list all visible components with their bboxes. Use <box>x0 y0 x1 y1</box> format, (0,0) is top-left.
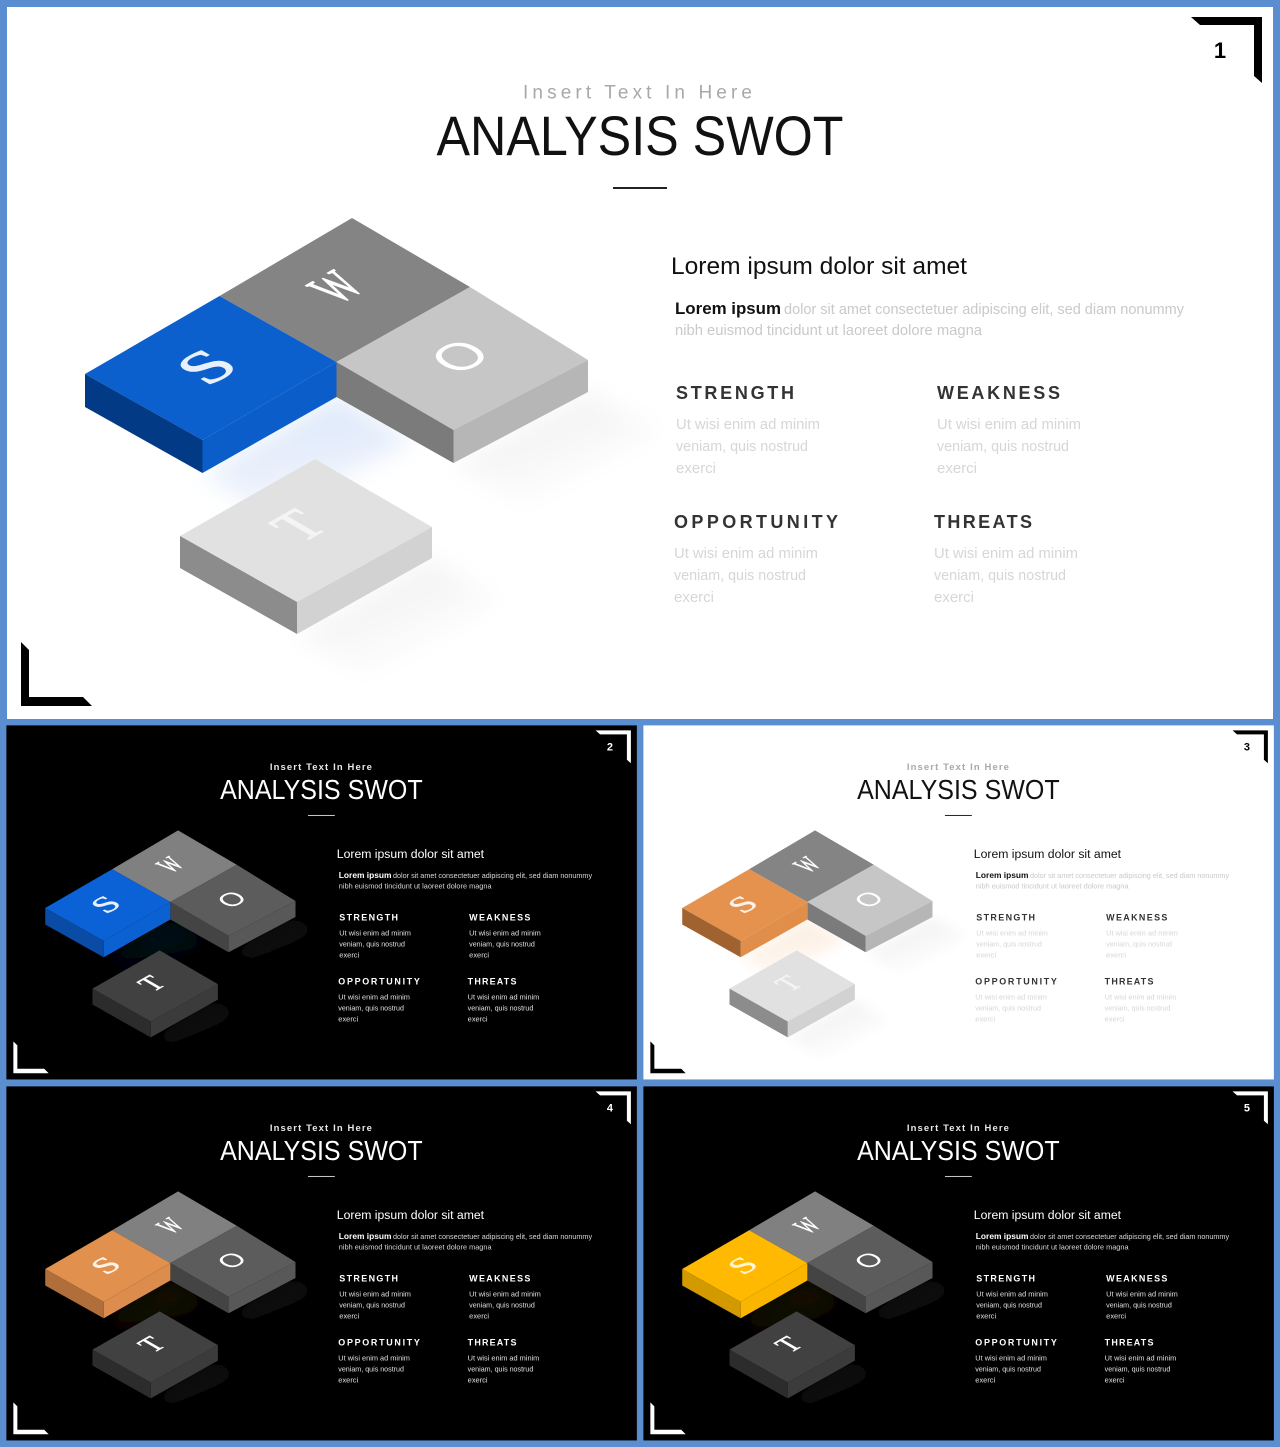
slide 5 weakness: veniam, quis nostrud <box>1106 1300 1172 1309</box>
slide 5 weakness: exerci <box>1106 1311 1126 1320</box>
slide 1 isometric SWOT blocks: O <box>416 331 505 382</box>
slide 5 threats: veniam, quis nostrud <box>1105 1365 1170 1374</box>
slide 5 strength: exerci <box>976 1311 997 1320</box>
slide 2 corner mark bottom left <box>13 1041 49 1073</box>
slide 4 opportunity: veniam, quis nostrud <box>338 1365 404 1374</box>
slide 5 title: ANALYSIS SWOT <box>857 1135 1060 1166</box>
slide 3 weakness: veniam, quis nostrud <box>1106 939 1172 948</box>
slide 3 opportunity <box>975 977 1057 1023</box>
slide 4 isometric SWOT blocks: S <box>83 1252 130 1279</box>
slide 4 text heading: Lorem ipsum dolor sit amet <box>337 1208 485 1222</box>
slide 2 isometric SWOT blocks: W <box>150 853 192 877</box>
slide 1 paragraph: nibh euismod tincidunt ut laoreet dolore magna <box>675 322 983 339</box>
slide 5 opportunity <box>975 1338 1057 1384</box>
slide 1 paragraph: Lorem ipsum <box>675 299 781 318</box>
slide 2 weakness: exerci <box>469 950 489 959</box>
slide 4 opportunity: exerci <box>338 1375 359 1384</box>
slide 4 opportunity <box>338 1338 420 1384</box>
slide 5 isometric SWOT blocks: O <box>847 1248 891 1273</box>
slide 4 strength: Ut wisi enim ad minim <box>339 1289 411 1298</box>
slide 1 weakness: WEAKNESS <box>937 383 1060 403</box>
slide 3 strength: exerci <box>976 950 997 959</box>
slide 2 isometric SWOT blocks: S <box>83 891 130 918</box>
slide 3 weakness: Ut wisi enim ad minim <box>1106 928 1178 937</box>
slide 3 subtitle: Insert Text In Here <box>907 762 1009 773</box>
slide 4 weakness: WEAKNESS <box>469 1273 530 1283</box>
slide 2 threats: THREATS <box>468 977 516 987</box>
slide 4 paragraph <box>339 1231 592 1252</box>
slide 5 opportunity: veniam, quis nostrud <box>975 1365 1041 1374</box>
slide 5 opportunity: exerci <box>975 1375 996 1384</box>
slide 3 isometric SWOT blocks: O <box>847 887 891 912</box>
slide 2 text heading: Lorem ipsum dolor sit amet <box>337 847 485 861</box>
slide 2 opportunity: veniam, quis nostrud <box>338 1004 404 1013</box>
slide 3 paragraph: Lorem ipsum <box>976 870 1029 880</box>
slide 4 paragraph: Lorem ipsum <box>339 1231 392 1241</box>
slide 3 strength <box>976 912 1048 959</box>
slide 2 strength: Ut wisi enim ad minim <box>339 928 411 937</box>
slide 1 opportunity: exerci <box>674 589 714 606</box>
slide 2 threats: Ut wisi enim ad minim <box>468 993 539 1002</box>
slide 1 opportunity: Ut wisi enim ad minim <box>674 545 818 562</box>
slide 5 corner mark bottom left <box>650 1402 686 1434</box>
slide 5 paragraph: Lorem ipsum <box>976 1231 1029 1241</box>
slide 1 weakness <box>937 383 1081 477</box>
slide 4 threats: veniam, quis nostrud <box>468 1365 533 1374</box>
slide 1 strength: veniam, quis nostrud <box>676 438 808 455</box>
slide 5 threats: exerci <box>1105 1375 1125 1384</box>
slide 3 paragraph <box>976 870 1229 891</box>
slide 5 paragraph <box>976 1231 1229 1252</box>
slide 2 isometric SWOT blocks: T <box>131 972 173 996</box>
slide 5 isometric SWOT blocks: T <box>768 1333 810 1357</box>
slide 4 opportunity: Ut wisi enim ad minim <box>338 1354 410 1363</box>
slide 3 isometric SWOT blocks: T <box>768 972 810 996</box>
slide 3 weakness: WEAKNESS <box>1106 912 1167 922</box>
slide 3 threats: exerci <box>1105 1014 1125 1023</box>
slide 1 subtitle: Insert Text In Here <box>523 82 752 104</box>
slide 5 weakness <box>1106 1273 1178 1320</box>
slide 5 weakness: WEAKNESS <box>1106 1273 1167 1283</box>
slide 1 threats: exerci <box>934 589 974 606</box>
slide 3 number: 3 <box>1244 741 1250 753</box>
slide 3 strength: veniam, quis nostrud <box>976 939 1042 948</box>
slide 2 strength: exerci <box>339 950 360 959</box>
slide 4 threats: THREATS <box>468 1338 516 1348</box>
slide 2 threats: exerci <box>468 1014 488 1023</box>
slide 3 opportunity: Ut wisi enim ad minim <box>975 993 1047 1002</box>
slide 2 opportunity: Ut wisi enim ad minim <box>338 993 410 1002</box>
slide 2 weakness: veniam, quis nostrud <box>469 939 535 948</box>
slide 5 number: 5 <box>1244 1102 1250 1114</box>
slide 2 number: 2 <box>607 741 613 753</box>
slide 1 text heading: Lorem ipsum dolor sit amet <box>671 253 967 280</box>
slide 1 strength: Ut wisi enim ad minim <box>676 416 820 433</box>
slide 2 threats: veniam, quis nostrud <box>468 1004 533 1013</box>
slide 4 paragraph: dolor sit amet consectetuer adipiscing elit, sed diam nonummy <box>393 1232 592 1241</box>
slide 1 isometric SWOT blocks <box>85 218 660 675</box>
slide 2 corner mark top right <box>596 730 631 763</box>
slide 1 threats <box>934 512 1078 606</box>
slide 2 opportunity: exerci <box>338 1014 359 1023</box>
slide 1 number: 1 <box>1214 38 1226 63</box>
slide 4 paragraph: nibh euismod tincidunt ut laoreet dolore magna <box>339 1243 492 1252</box>
slide 2 strength <box>339 912 411 959</box>
slide 1 threats: THREATS <box>934 512 1032 532</box>
slide 3 text heading: Lorem ipsum dolor sit amet <box>974 847 1122 861</box>
slide 4 threats: exerci <box>468 1375 488 1384</box>
slide 1 paragraph: dolor sit amet consectetuer adipiscing elit, sed diam nonummy <box>784 301 1184 318</box>
slide 5 threats: THREATS <box>1105 1338 1153 1348</box>
slide 5 opportunity: Ut wisi enim ad minim <box>975 1354 1047 1363</box>
slide 1 weakness: exerci <box>937 460 977 477</box>
slide 4 strength: exerci <box>339 1311 360 1320</box>
slide 3 opportunity: veniam, quis nostrud <box>975 1004 1041 1013</box>
slide 1 opportunity: OPPORTUNITY <box>674 512 838 532</box>
slide 4 isometric SWOT blocks <box>45 1191 331 1419</box>
slide 1 opportunity: veniam, quis nostrud <box>674 567 806 584</box>
slide 1 strength: exerci <box>676 460 716 477</box>
slide 4 strength: veniam, quis nostrud <box>339 1300 405 1309</box>
slide 2 strength: STRENGTH <box>339 912 398 922</box>
slide 2 paragraph: nibh euismod tincidunt ut laoreet dolore magna <box>339 882 492 891</box>
slide 3 isometric SWOT blocks: S <box>720 891 767 918</box>
slide 5 threats: Ut wisi enim ad minim <box>1105 1354 1176 1363</box>
slide 4 weakness: Ut wisi enim ad minim <box>469 1289 541 1298</box>
slide 1 strength: STRENGTH <box>676 383 794 403</box>
slide 5 text heading: Lorem ipsum dolor sit amet <box>974 1208 1122 1222</box>
slide 1 threats: Ut wisi enim ad minim <box>934 545 1078 562</box>
slide 1 isometric SWOT blocks: T <box>257 502 342 550</box>
slide 4 weakness <box>469 1273 541 1320</box>
slide 5 corner mark top right <box>1233 1091 1268 1124</box>
slide 3 paragraph: nibh euismod tincidunt ut laoreet dolore magna <box>976 882 1129 891</box>
panel: slide 4 dark orange <box>6 1086 637 1440</box>
slide 5 isometric SWOT blocks: S <box>720 1252 767 1279</box>
slide 2 subtitle: Insert Text In Here <box>270 762 372 773</box>
slide 2 threats <box>468 977 539 1023</box>
slide 1 isometric SWOT blocks: S <box>160 340 254 394</box>
slide 3 isometric SWOT blocks <box>682 830 968 1058</box>
slide 3 weakness <box>1106 912 1178 959</box>
slide 2 opportunity <box>338 977 420 1023</box>
slide 5 isometric SWOT blocks <box>682 1191 968 1419</box>
slide 1 title: ANALYSIS SWOT <box>436 104 844 167</box>
slide 5 strength: Ut wisi enim ad minim <box>976 1289 1048 1298</box>
slide 2 paragraph: Lorem ipsum <box>339 870 392 880</box>
panel: slide 1 light blue <box>7 7 1273 719</box>
slide 3 threats: THREATS <box>1105 977 1153 987</box>
slide 1 opportunity <box>674 512 838 606</box>
slide 5 isometric SWOT blocks: W <box>787 1214 829 1238</box>
slide 5 opportunity: OPPORTUNITY <box>975 1338 1057 1348</box>
slide 1 isometric SWOT blocks: W <box>294 262 379 311</box>
slide 3 opportunity: exerci <box>975 1014 996 1023</box>
slide 3 weakness: exerci <box>1106 950 1126 959</box>
slide 1 threats: veniam, quis nostrud <box>934 567 1066 584</box>
slide 2 title: ANALYSIS SWOT <box>220 774 423 805</box>
slide 5 paragraph: dolor sit amet consectetuer adipiscing elit, sed diam nonummy <box>1030 1232 1229 1241</box>
slide 4 opportunity: OPPORTUNITY <box>338 1338 420 1348</box>
slide 3 isometric SWOT blocks: W <box>787 853 829 877</box>
slide 4 strength <box>339 1273 411 1320</box>
slide 3 threats <box>1105 977 1176 1023</box>
slide 2 weakness: WEAKNESS <box>469 912 530 922</box>
slide 5 subtitle: Insert Text In Here <box>907 1123 1009 1134</box>
slide 2 weakness <box>469 912 541 959</box>
slide 3 title: ANALYSIS SWOT <box>857 774 1060 805</box>
slide 1 paragraph <box>675 299 1184 339</box>
slide 4 subtitle: Insert Text In Here <box>270 1123 372 1134</box>
slide 3 strength: Ut wisi enim ad minim <box>976 928 1048 937</box>
slide 5 paragraph: nibh euismod tincidunt ut laoreet dolore magna <box>976 1243 1129 1252</box>
slide 3 corner mark bottom left <box>650 1041 686 1073</box>
slide 3 corner mark top right <box>1233 730 1268 763</box>
slide 1 weakness: veniam, quis nostrud <box>937 438 1069 455</box>
slide 4 isometric SWOT blocks: O <box>210 1248 254 1273</box>
slide 5 strength <box>976 1273 1048 1320</box>
panel: slide 2 dark blue <box>6 725 637 1079</box>
panel: slide 3 light orange <box>643 725 1274 1079</box>
slide 4 corner mark top right <box>596 1091 631 1124</box>
slide 4 weakness: exerci <box>469 1311 489 1320</box>
slide 3 paragraph: dolor sit amet consectetuer adipiscing elit, sed diam nonummy <box>1030 871 1229 880</box>
slide 3 threats: Ut wisi enim ad minim <box>1105 993 1176 1002</box>
slide 4 threats <box>468 1338 539 1384</box>
slide 4 number: 4 <box>607 1102 614 1114</box>
slide 3 strength: STRENGTH <box>976 912 1035 922</box>
slide 1 corner mark top right <box>1191 17 1262 83</box>
slide 2 weakness: Ut wisi enim ad minim <box>469 928 541 937</box>
slide 5 strength: STRENGTH <box>976 1273 1035 1283</box>
slide 4 weakness: veniam, quis nostrud <box>469 1300 535 1309</box>
panel: slide 5 dark yellow <box>643 1086 1274 1440</box>
slide 3 opportunity: OPPORTUNITY <box>975 977 1057 987</box>
slide 2 paragraph <box>339 870 592 891</box>
slide 4 isometric SWOT blocks: T <box>131 1333 173 1357</box>
slide 2 isometric SWOT blocks: O <box>210 887 254 912</box>
slide 2 strength: veniam, quis nostrud <box>339 939 405 948</box>
slide 5 strength: veniam, quis nostrud <box>976 1300 1042 1309</box>
slide 3 threats: veniam, quis nostrud <box>1105 1004 1170 1013</box>
slide 4 isometric SWOT blocks: W <box>150 1214 192 1238</box>
slide 2 opportunity: OPPORTUNITY <box>338 977 420 987</box>
slide 1 strength <box>676 383 820 477</box>
slide 2 isometric SWOT blocks <box>45 830 331 1058</box>
slide 4 title: ANALYSIS SWOT <box>220 1135 423 1166</box>
slide 5 weakness: Ut wisi enim ad minim <box>1106 1289 1178 1298</box>
slide 1 corner mark bottom left <box>21 642 92 706</box>
slide 5 threats <box>1105 1338 1176 1384</box>
slide 2 paragraph: dolor sit amet consectetuer adipiscing elit, sed diam nonummy <box>393 871 592 880</box>
slide 4 corner mark bottom left <box>13 1402 49 1434</box>
slide 1 weakness: Ut wisi enim ad minim <box>937 416 1081 433</box>
slide 4 strength: STRENGTH <box>339 1273 398 1283</box>
slide 4 threats: Ut wisi enim ad minim <box>468 1354 539 1363</box>
